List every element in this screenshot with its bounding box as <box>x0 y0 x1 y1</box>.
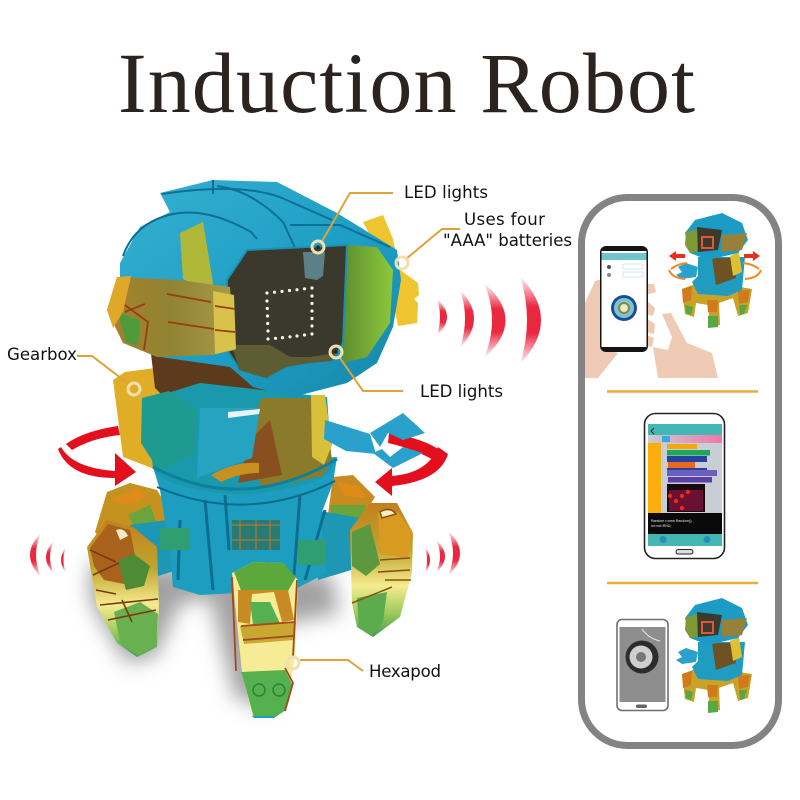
red sound waves beside head <box>437 276 541 364</box>
robot torso <box>141 383 337 495</box>
gearbox housing <box>113 364 185 470</box>
callout: AAA batteries: "AAA" batteries <box>443 231 572 250</box>
neck <box>150 345 285 410</box>
icon: phone with joystick <box>600 246 648 352</box>
icon: phone with block code <box>644 414 724 558</box>
left front leg <box>87 520 159 657</box>
left side panel <box>107 276 236 357</box>
mini robot with motion arrows <box>669 213 761 328</box>
rotation arrow left, rear arc <box>66 426 120 450</box>
camera module <box>303 252 325 280</box>
head top ridges <box>123 180 390 256</box>
callout: Hexapod: Hexapod <box>369 662 441 681</box>
left ear tab <box>180 222 213 291</box>
hand holding phone <box>585 279 656 378</box>
rotation arrow right, rear arc <box>388 433 443 462</box>
pointing hand <box>653 313 718 378</box>
icon: phone with block code: int rnd=RND; <box>651 524 671 528</box>
face screen <box>227 245 347 378</box>
robot base <box>153 457 337 595</box>
callout: Hexapod <box>287 657 441 681</box>
icon: phone with block code: Random r=new Random(); <box>651 519 692 523</box>
back legs <box>95 475 375 550</box>
right ear yellow connector <box>363 215 419 326</box>
callout: AAA batteries <box>396 210 572 269</box>
callout: LED lights lower: LED lights <box>420 382 503 401</box>
red sound waves left of legs <box>30 533 66 577</box>
robot head shell <box>120 180 401 397</box>
callout: LED lights top <box>312 183 488 253</box>
title: Induction Robot <box>118 35 695 131</box>
mini robot two <box>676 598 752 713</box>
right claw arm <box>324 413 425 468</box>
divider top <box>607 390 758 393</box>
rotation arrow left, front arc with head <box>58 447 136 486</box>
callout: AAA batteries: Uses four <box>464 210 545 229</box>
centre front leg <box>232 562 298 718</box>
callout: LED lights lower <box>330 346 503 401</box>
head right green panel <box>343 245 393 363</box>
lower screen reflection <box>232 345 336 378</box>
floor shadow <box>90 563 340 708</box>
divider bottom <box>607 582 758 584</box>
callout: Gearbox: Gearbox <box>7 345 77 364</box>
panel: app control modes <box>582 198 778 746</box>
callout: Gearbox <box>7 345 140 395</box>
right front leg <box>350 503 413 637</box>
rotation arrow right, front arc with head <box>375 447 448 496</box>
callout: LED lights top: LED lights <box>404 183 488 202</box>
LED dot matrix <box>265 286 314 341</box>
red sound waves right of legs <box>425 531 460 576</box>
leg struts <box>130 510 360 580</box>
icon: phone with sound disc <box>617 620 668 710</box>
